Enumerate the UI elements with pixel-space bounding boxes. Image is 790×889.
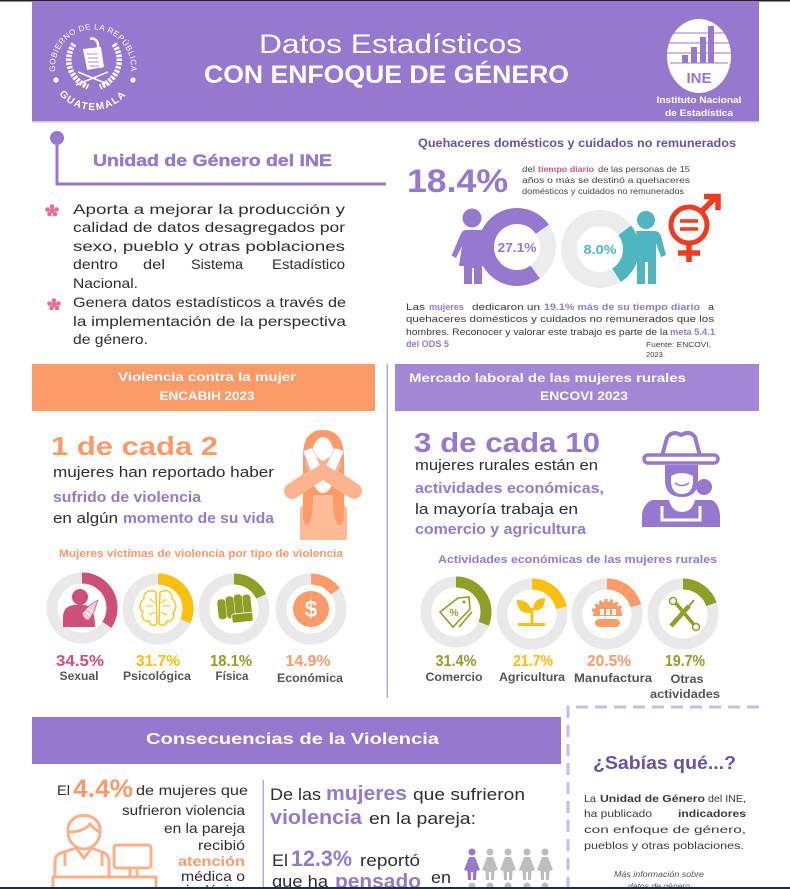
paragraph: Las (406, 302, 425, 313)
donut: Económica: Económica (277, 673, 344, 685)
text: mujeres que sufrieron violencia: mujeres (326, 783, 407, 805)
text: mujeres que sufrieron violencia: violencia (270, 807, 363, 829)
banner: Violencia contra la mujer (118, 370, 296, 384)
donut: Otras actividades: Otras (670, 674, 704, 686)
bullet text 1: del (143, 256, 165, 272)
bullet text 1: calidad de datos desagregados por (73, 219, 345, 235)
banner (395, 364, 759, 411)
donut: Sexual: Sexual (60, 671, 98, 683)
title: CON ENFOQUE DE GÉNERO (204, 60, 569, 89)
icon: doctor (53, 816, 156, 889)
donut: Física: Física (216, 671, 249, 683)
paragraph: a (708, 302, 715, 313)
bullet text 1: dentro (73, 256, 118, 272)
paragraph: quehaceres domésticos y cuidados no remunerados que los (406, 314, 714, 325)
title (204, 29, 569, 89)
paragraph: del ODS 5 (406, 339, 450, 350)
heading with connector: Unidad de Género del INE (93, 151, 332, 170)
source (646, 342, 711, 359)
more information note (614, 870, 705, 889)
description: mujeres rurales están en (415, 457, 598, 474)
bullet text 1: Nacional. (73, 275, 138, 291)
donut: Manufactura (574, 584, 653, 685)
text: atención médica: recibió (198, 837, 245, 853)
bullet text 1: sexo, pueblo y otras poblaciones (73, 238, 345, 254)
donut: Psicológica: 31.7% (136, 653, 180, 670)
banner: ENCABIH 2023 (160, 389, 255, 403)
institute name: Instituto Nacional (656, 95, 742, 106)
bullet text 1: Aporta a mejorar la producción y (73, 201, 345, 217)
donut: Manufactura: Manufactura (574, 673, 653, 685)
text: mujeres que sufrieron violencia: reportó (360, 851, 420, 870)
donut: Psicológica: Psicológica (123, 671, 192, 683)
icon: flower bullet (45, 204, 59, 216)
paragraph: dedicaron un (472, 302, 540, 313)
panel: Mercado laboral (395, 364, 759, 701)
donut: Otras actividades (650, 584, 720, 701)
description: comercio y agricultura (415, 521, 587, 538)
text: mujeres que sufrieron violencia: en (431, 868, 451, 887)
institute name: de Estadística (665, 108, 734, 119)
icon: Guatemala seal (50, 24, 137, 110)
donut: hombres 8.0%: 8.0% (584, 242, 617, 257)
description: con enfoque de género, (584, 824, 746, 836)
institute name (656, 95, 742, 119)
text: atención médica: médica o (181, 868, 245, 884)
paragraph: mujeres (429, 302, 464, 313)
donut: mujeres 27.1% (474, 204, 560, 290)
paragraph: meta 5.4.1 (670, 327, 716, 338)
donut: Agricultura (499, 584, 566, 684)
donut: Comercio: Comercio (426, 672, 482, 684)
donut: Comercio: % (450, 608, 459, 619)
text: mujeres que sufrieron violencia: El (272, 851, 288, 870)
stat description: tiempo diario (538, 164, 594, 174)
panel: Violencia contra la mujer (32, 364, 375, 685)
bullet text 2 (73, 294, 346, 347)
text: atención médica (57, 775, 248, 889)
donut: Psicológica (123, 579, 192, 683)
text: atención médica: 4.4% (73, 775, 133, 803)
source: 2023. (646, 352, 665, 359)
big stat 18.4%: 18.4% (407, 163, 508, 199)
description (415, 457, 604, 538)
description: la mayoría trabaja en (415, 501, 578, 518)
donut: Comercio (426, 582, 486, 684)
icon: woman with crossed arms (292, 430, 354, 540)
text: atención médica: El (57, 782, 70, 798)
stat description: del (522, 164, 535, 174)
description: indicadores (678, 808, 746, 820)
donut: Económica: $ (305, 596, 318, 622)
donut: Manufactura: 20.5% (587, 653, 631, 670)
heading: ¿Sabías qué...? (593, 753, 736, 773)
text: atención médica: en la pareja (164, 820, 245, 836)
banner: Consecuencias de la Violencia (146, 731, 439, 748)
stat description: domésticos y cuidados no remunerados (522, 186, 684, 196)
text: mujeres que sufrieron violencia: De las (270, 785, 321, 804)
icon: man (636, 211, 666, 284)
paragraph: 19.1% más de su tiempo diario (544, 302, 700, 313)
heading with connector (50, 131, 386, 184)
panel: Unidad de Género (45, 131, 386, 347)
panel: ¿Sabías qué...? (568, 707, 760, 889)
banner (32, 364, 375, 411)
donut: Otras actividades: actividades (650, 689, 720, 701)
donut: Agricultura: 21.7% (513, 653, 553, 670)
bullet text 2: Genera datos estadísticos a través de (73, 294, 346, 310)
bullet text 1: Sistema (191, 256, 243, 272)
icon: Guatemala seal: GOBIERNO DE LA REPÚBLICA (50, 24, 137, 72)
stat description: de las personas de 15 (598, 164, 690, 174)
stat description: años o más se destinó a quehaceres (522, 175, 690, 185)
description (53, 464, 275, 527)
panel: Quehaceres domésticos (406, 138, 736, 359)
heading: Quehaceres domésticos y cuidados no remunerados (418, 138, 736, 150)
bullet text 2: la implementación de la perspectiva (73, 313, 346, 329)
description: La (584, 793, 596, 805)
donut: Comercio: 31.4% (436, 653, 477, 670)
description: momento de su vida (123, 510, 275, 527)
donut: Física: 18.1% (210, 653, 252, 670)
description: Unidad de Género (600, 793, 705, 805)
panel: Consecuencias de la Violencia (32, 717, 561, 889)
icon: woman (452, 208, 490, 284)
description: pueblos y otras poblaciones. (584, 840, 744, 852)
description: sufrido de violencia (53, 489, 202, 506)
banner: Mercado laboral de las mujeres rurales (409, 371, 686, 385)
donut: Económica (277, 579, 344, 685)
subtitle: Mujeres víctimas de violencia por tipo de violencia (59, 548, 344, 560)
more information note: Más información sobre (614, 870, 705, 879)
bullet text 1: Estadístico (272, 256, 345, 272)
text: atención médica: de mujeres que (136, 782, 248, 798)
description: actividades económicas, (415, 480, 604, 497)
text: atención médica: sufrieron violencia (122, 802, 245, 818)
text: mujeres que sufrieron violencia (270, 783, 525, 889)
bullet text 2: de género. (73, 331, 148, 347)
description: del INE, (708, 793, 746, 805)
donut: hombres 8.0% (557, 206, 643, 292)
icon: rural woman with hat (642, 433, 720, 527)
source: Fuente: ENCOVI, (646, 342, 711, 349)
banner: ENCOVI 2023 (540, 389, 628, 403)
donut: Física (204, 579, 264, 683)
stat description (522, 164, 690, 196)
text: mujeres que sufrieron violencia: que sufrieron (413, 785, 525, 804)
big stat: 1 de cada 2 (51, 431, 218, 461)
icon: flower bullet (47, 298, 61, 310)
icon: INE logo (667, 19, 731, 93)
text: mujeres que sufrieron violencia: en la pareja: (369, 809, 476, 828)
icon: INE logo: INE (686, 70, 712, 87)
title: Datos Estadísticos (259, 29, 522, 59)
donut: Sexual (52, 578, 112, 683)
description (584, 793, 746, 852)
header band (32, 1, 759, 122)
donut: Económica: 14.9% (286, 653, 331, 670)
donut: Agricultura: Agricultura (499, 672, 566, 684)
paragraph: hombres. Reconocer y valorar este trabajo es parte de la (406, 327, 669, 338)
description: mujeres han reportado haber (53, 464, 274, 481)
bullet text 1 (73, 201, 345, 291)
donut: Otras actividades: 19.7% (665, 653, 705, 670)
icon: five women pictogram (464, 848, 553, 889)
description: ha publicado (584, 808, 652, 820)
description: en algún (53, 510, 118, 527)
donut: Sexual: 34.5% (56, 653, 104, 670)
subtitle: Actividades económicas de las mujeres rurales (438, 554, 717, 566)
banner (32, 717, 561, 764)
text: atención médica: atención (178, 853, 245, 869)
icon: gender equality symbol (671, 196, 718, 262)
text: mujeres que sufrieron violencia: 12.3% (291, 846, 352, 871)
big stat: 3 de cada 10 (414, 427, 600, 458)
paragraph (406, 302, 716, 350)
donut: mujeres 27.1%: 27.1% (498, 240, 537, 255)
icon: Guatemala seal: GUATEMALA (60, 90, 126, 110)
